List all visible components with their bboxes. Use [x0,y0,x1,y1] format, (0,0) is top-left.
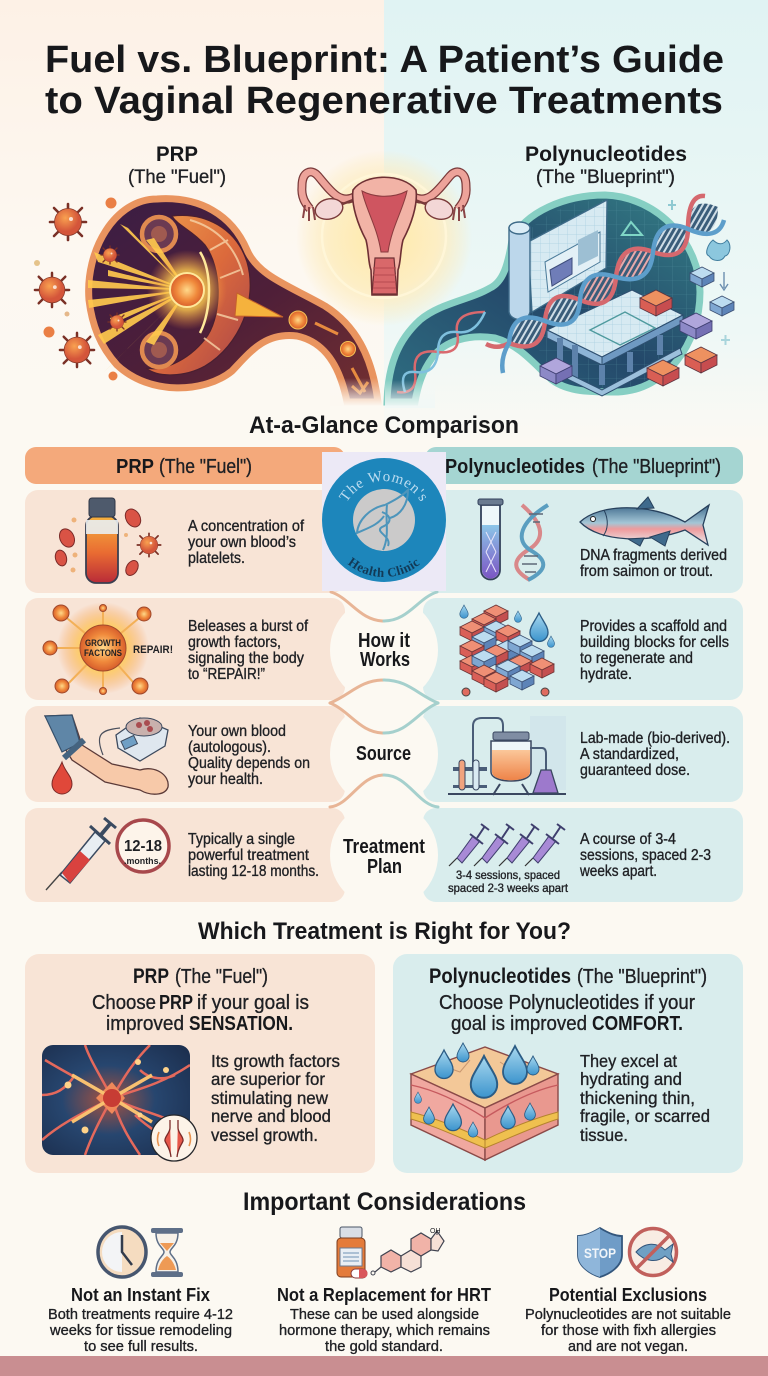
title: to Vaginal Regenerative Treatments [45,80,723,122]
text [579,831,711,880]
panel heading: PRP [159,991,193,1014]
heading: PRP hero label: (The "Fuel") [128,167,226,188]
title [45,39,724,122]
caption: spaced 2-3 weeks apart [448,881,569,895]
panel heading: PRP [133,965,169,988]
text: hydrating and [580,1069,682,1089]
caption [448,868,569,895]
label: treatment plan: Plan [367,856,402,878]
text [277,1285,491,1355]
text: building blocks for cells [580,634,729,651]
icon: stop shield and no fish [578,1228,676,1277]
text: Quality depends on [188,755,310,772]
panel heading: SENSATION. [189,1012,293,1035]
label: source: Source [356,743,411,765]
heading: PRP hero label [128,143,226,188]
virus particles [50,204,86,240]
text: weeks apart. [579,863,657,880]
text: Your own blood [188,723,286,740]
icon: syringe [46,818,116,890]
panel heading: if your goal is [197,991,309,1014]
text: and are not vegan. [568,1338,688,1355]
label: treatment plan: Treatment [343,836,425,858]
illustration: uterus with glow [296,150,472,326]
text: guaranteed dose. [580,762,690,779]
center label circles [330,590,438,910]
arrow [235,293,283,317]
icon: 12-18 months clock: 12-18 [124,838,162,855]
title: Fuel vs. Blueprint: A Patient’s Guide [45,39,724,81]
text: A course of 3-4 [580,831,676,848]
text: Potential Exclusions [549,1285,707,1305]
consideration: not a replacement for HRT [277,1227,491,1355]
illustration: hydrated tissue cube [411,1043,558,1160]
connector ribbons [330,592,438,807]
text: the gold standard. [325,1338,443,1355]
text: nerve and blood [211,1106,331,1126]
blueprint roll [509,228,530,320]
panel heading: (The "Fuel") [175,966,268,988]
row 2 right: scaffold [423,598,743,700]
row 4 left: single treatment [25,808,345,902]
row 4 right: course of sessions [423,808,743,902]
icon: lab reactor [448,716,566,795]
text: Not a Replacement for HRT [277,1285,491,1305]
icon: four syringes [449,824,565,866]
DNA helix [486,196,724,373]
caption: 3-4 sessions, spaced [456,868,560,882]
icon: brick scaffold [460,605,555,696]
column header: Polynucleotides: (The "Blueprint") [592,456,721,478]
column header: PRP: (The "Fuel") [159,456,252,478]
text: Both treatments require 4-12 [48,1306,233,1323]
floating blocks [640,290,672,316]
row 1 right: DNA fragments [423,490,743,593]
icon: test tube [478,499,503,580]
text: to “REPAIR!” [188,666,265,683]
consideration: potential exclusions [525,1228,731,1355]
panel heading [92,965,309,1035]
text: to see full results. [84,1338,198,1355]
text: Typically a single [188,831,295,848]
text: lasting 12-18 months. [188,863,319,880]
icon: clock and hourglass [98,1227,183,1277]
text [188,618,309,683]
text: Lab-made (bio-derived). [580,730,730,747]
heading: Polynucleotides hero label: (The "Blueprint") [536,167,675,188]
panel: choose PRP [25,954,375,1173]
consideration: not an instant fix [48,1227,233,1355]
text [525,1285,731,1355]
icon: DNA strand [516,505,548,580]
text: Not an Instant Fix [71,1285,210,1305]
swoosh body [89,199,378,402]
text: (autologous). [188,739,271,756]
footer bar [0,1356,768,1376]
icon: pill bottle and hormone molecule [337,1227,444,1278]
text: Beleases a burst of [188,618,309,635]
text: tissue. [580,1125,628,1145]
text: hormone therapy, which remains [279,1322,490,1339]
label: treatment plan [343,836,425,878]
row 1 left: blood platelets [25,490,345,593]
heading: Polynucleotides hero label [525,143,687,188]
label: how it works: How it [358,630,410,652]
text: sessions, spaced 2-3 [580,847,711,864]
heading: important considerations: Important Considerations [243,1188,526,1216]
panel heading: Choose [92,991,156,1014]
icon: growth factor burst: REPAIR! [133,644,173,656]
swoosh body [387,195,700,402]
text: A concentration of [188,518,305,535]
illustration: polynucleotide blueprint swoosh [385,195,734,408]
logo lettering: The Women's [338,470,426,501]
panel heading: improved [106,1012,184,1035]
text [580,618,729,683]
text: weeks for tissue remodeling [49,1322,232,1339]
text [188,723,310,788]
column header: Polynucleotides: Polynucleotides [445,456,585,478]
panel heading: COMFORT. [592,1012,683,1035]
text: your health. [188,771,263,788]
illustration: nerve cell [42,1045,197,1161]
text [211,1051,340,1145]
panel heading: Choose Polynucleotides if your [439,991,695,1014]
platform [547,290,683,357]
icon: salmon [580,497,709,546]
icon: 12-18 months clock: .months. [124,856,161,867]
text [188,831,319,880]
text: Polynucleotides are not suitable [525,1306,731,1323]
text: platelets. [188,550,245,567]
text: your own blood’s [188,534,296,551]
text: to regenerate and [580,650,693,667]
column header: PRP [25,447,345,484]
icon: arm, centrifuge and blood drop [45,715,168,794]
text: signaling the body [188,650,304,667]
text [580,547,727,580]
heading: Polynucleotides hero label: Polynucleotides [525,143,687,166]
icon: plasma vial [54,498,161,583]
text: fragile, or scarred [580,1106,710,1126]
heading: which treatment: Which Treatment is Right for You? [198,918,571,945]
logo lettering: Health Clinic [348,557,420,577]
heading: at-a-glance comparison: At-a-Glance Comparison [249,412,519,439]
text: vessel growth. [211,1125,318,1145]
heading: PRP hero label: PRP [156,143,198,166]
rotor [146,215,250,375]
panel heading [429,965,707,1035]
text: from saimon or trout. [580,563,713,580]
logo: The Women's Health Clinic [322,452,446,591]
text: powerful treatment [188,847,310,864]
text: They excel at [580,1051,677,1071]
text [48,1285,233,1355]
panel heading: Polynucleotides [429,965,571,988]
column header: Polynucleotides [425,447,743,484]
row 3 left: own blood [25,706,345,802]
label: how it works [358,630,410,671]
text [580,730,730,779]
illustration: PRP fuel burst swoosh [34,198,384,406]
icon: pill bottle and hormone molecule: OH [430,1228,440,1235]
text: are superior for [211,1069,325,1089]
column header: PRP: PRP [116,456,154,478]
panel: choose Polynucleotides [393,954,743,1173]
text: A standardized, [580,746,679,763]
icon: growth factor burst: FACTONS [84,648,122,658]
text: thickening thin, [580,1088,695,1108]
row 2 left: growth factors [25,598,345,700]
logo lettering [338,470,426,577]
text: hydrate. [580,666,632,683]
text [580,1051,710,1145]
text: These can be used alongside [290,1306,479,1323]
icon: growth factor burst: GROWTH [85,638,121,648]
label: how it works: Works [360,649,410,671]
icon: growth factor burst [43,602,173,694]
panel heading: (The "Blueprint") [577,966,707,988]
icon: 12-18 months clock [117,820,169,872]
text: growth factors, [188,634,281,651]
text [188,518,305,567]
text: DNA fragments derived [580,547,727,564]
triangle mark [622,222,642,235]
text: for those with fixh allergies [541,1322,716,1339]
text: stimulating new [211,1088,328,1108]
logo caduceus [357,490,408,550]
blueprint sheet [528,200,607,312]
icon: stop shield and no fish: STOP [584,1245,616,1261]
text: Provides a scaffold and [580,618,727,635]
burst rays [88,224,187,372]
small DNA in neck [397,312,485,392]
panel heading: goal is improved [451,1012,587,1035]
text: Its growth factors [211,1051,340,1071]
row 3 right: lab-made [423,706,743,802]
